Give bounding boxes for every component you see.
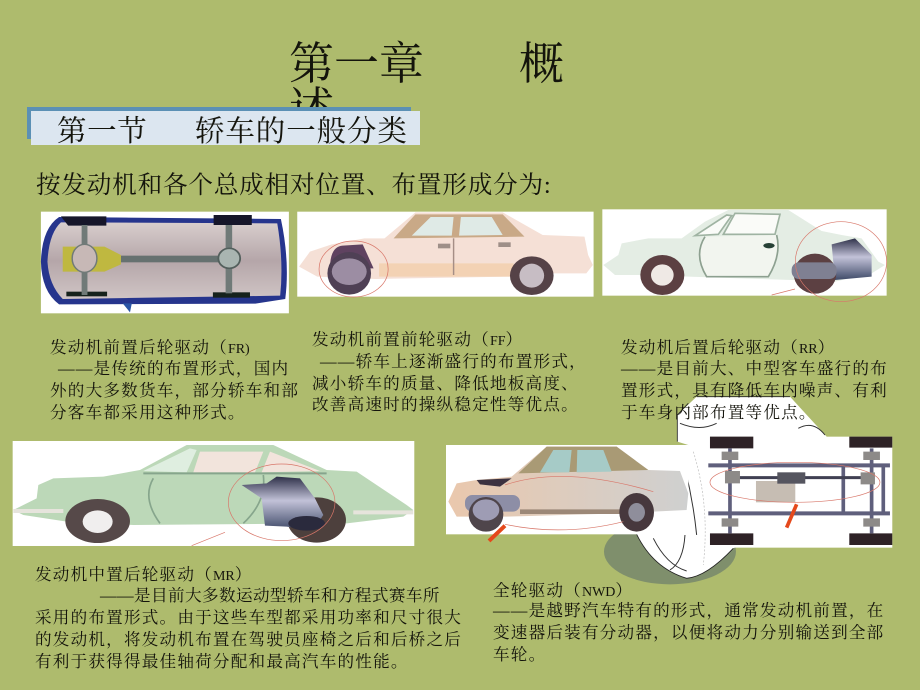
section heading banner: 第一节: [57, 115, 147, 148]
title: 述: [289, 84, 334, 134]
image: FF front engine front drive car: [297, 212, 594, 297]
section heading banner: [27, 107, 420, 148]
text: MR description: ——是目前大多数运动型轿车和方程式赛车所: [99, 586, 440, 605]
text: FF description: [312, 330, 587, 414]
image: RR rear engine car: [602, 209, 887, 302]
text: NWD description: 变速器后装有分动器，以便将动力分别输送到全部: [493, 623, 884, 642]
text: RR description: 于车身内部布置等优点。: [621, 403, 817, 422]
illustration: white tyre line art with shadow: [604, 397, 827, 584]
text: RR description: 置形式，具有降低车内噪声、有利: [621, 381, 888, 400]
text: FF description: 发动机前置前轮驱动（FF）: [312, 330, 523, 349]
text: FF description: 减小轿车的质量、降低地板高度、: [312, 374, 579, 393]
text: MR description: 发动机中置后轮驱动（MR）: [35, 565, 253, 584]
text: MR description: 有利于获得得最佳轴荷分配和最高汽车的性能。: [35, 652, 409, 671]
text: FR description: 分客车都采用这种形式。: [50, 403, 246, 422]
text: MR description: [35, 565, 462, 671]
image: NWD chassis: [708, 437, 892, 548]
text: FR description: 外的大多数货车，部分轿车和部: [50, 381, 299, 400]
text: FF description: ——轿车上逐渐盛行的布置形式，: [319, 352, 587, 371]
text: RR description: 发动机后置后轮驱动（RR）: [621, 338, 835, 357]
text: FR description: [50, 338, 299, 422]
text: FR description: ——是传统的布置形式，国内: [57, 359, 289, 378]
text: FF description: 改善高速时的操纵稳定性等优点。: [312, 395, 579, 414]
image: FR chassis top view: [41, 212, 289, 313]
title: 第一章: [289, 39, 424, 89]
text: NWD description: 全轮驱动（NWD）: [493, 581, 633, 600]
text: NWD description: 车轮。: [493, 645, 546, 664]
text: FR description: 发动机前置后轮驱动（FR): [50, 338, 250, 357]
title: 概: [519, 39, 564, 89]
section heading banner: 轿车的一般分类: [195, 115, 408, 148]
title: [289, 39, 564, 134]
text: NWD description: ——是越野汽车特有的形式，通常发动机前置，在: [492, 601, 884, 620]
image: MR mid engine car: [13, 441, 414, 546]
image: NWD car: [446, 445, 688, 534]
text: MR description: 的发动机，将发动机布置在驾驶员座椅之后和后桥之后: [35, 630, 462, 649]
arrow: NWD car: [489, 526, 505, 541]
text: NWD description: [492, 581, 884, 664]
text: RR description: [620, 338, 888, 422]
text: RR description: ——是目前大、中型客车盛行的布: [620, 359, 888, 378]
text: MR description: 采用的布置形式。由于这些车型都采用功率和尺寸很大: [35, 608, 462, 627]
subheading: 按发动机和各个总成相对位置、布置形成分为:: [36, 171, 552, 199]
